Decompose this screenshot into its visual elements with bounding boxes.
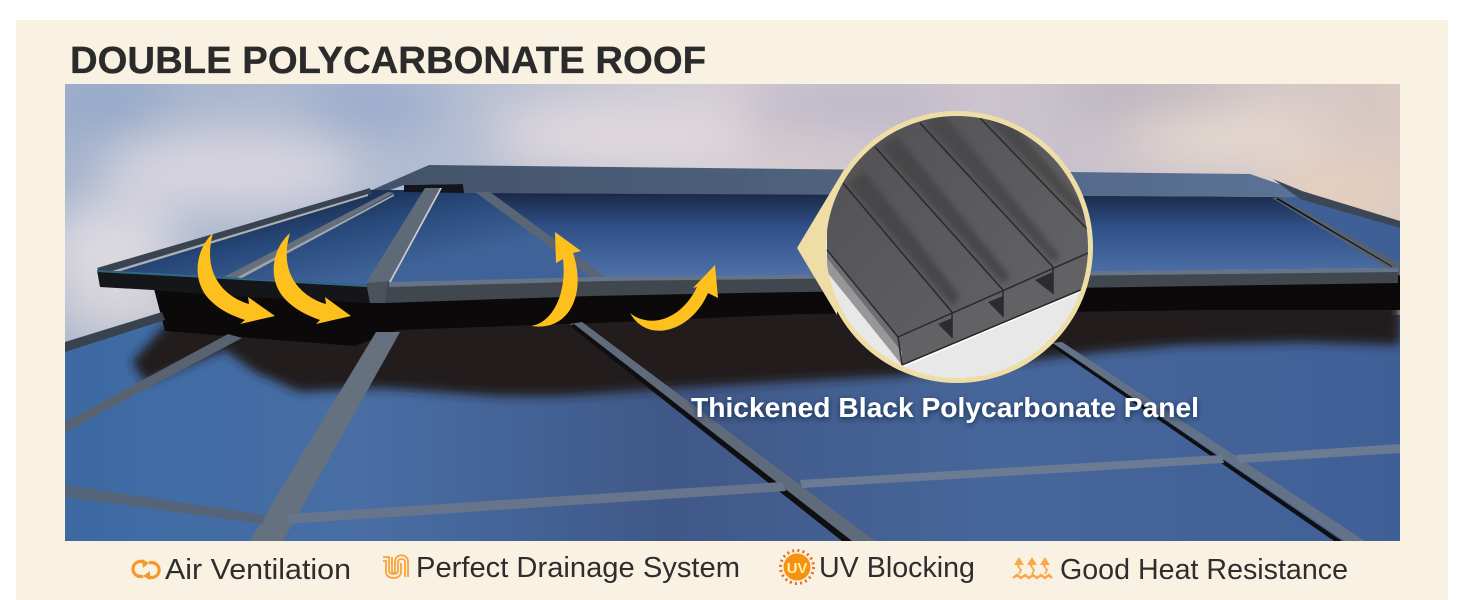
arrow: air flowing out, up <box>531 232 581 327</box>
roof ridge cap <box>372 165 1302 197</box>
arrow: air flowing out, right <box>630 265 718 331</box>
feature: UV blocking: UV Blocking <box>819 552 975 584</box>
lower roof bars <box>65 322 1400 541</box>
icon: drainage channels <box>383 555 408 578</box>
feature: heat resistance: Good Heat Resistance <box>1060 554 1348 586</box>
ridge notch <box>404 184 464 193</box>
icon: rising heat arrows <box>1013 557 1052 578</box>
arrow: air flowing in, left <box>198 233 275 324</box>
feature: air ventilation: Air Ventilation <box>165 554 351 586</box>
icon: UV sun: UV <box>787 560 807 577</box>
upper roof glass left <box>97 190 606 287</box>
upper roof glass middle and right <box>475 192 1393 277</box>
polycarbonate panel <box>827 116 1088 336</box>
reflected shadow on lower roof <box>126 310 1400 404</box>
photo: gazebo roof against the sky <box>40 81 1410 541</box>
far right glass <box>1280 197 1400 270</box>
magnifier lens: panel close-up <box>821 100 1093 383</box>
sky with clouds <box>40 81 1410 354</box>
icon: air ventilation loops <box>133 559 159 580</box>
magnifier pointer <box>797 168 845 315</box>
far right eave <box>1273 179 1400 228</box>
upper roof ribs <box>97 188 1400 283</box>
callout label: Thickened Black Polycarbonate Panel <box>691 392 1199 423</box>
feature: drainage system: Perfect Drainage System <box>416 552 740 584</box>
upper roof fascia <box>97 268 1398 303</box>
lower roof glass <box>65 315 1400 541</box>
lower left eave <box>65 312 165 352</box>
icon: UV sun <box>780 550 814 584</box>
dark space under upper roof <box>153 270 1400 346</box>
title: DOUBLE POLYCARBONATE ROOF <box>70 40 706 82</box>
arrow: air flowing in, centre <box>274 233 351 324</box>
